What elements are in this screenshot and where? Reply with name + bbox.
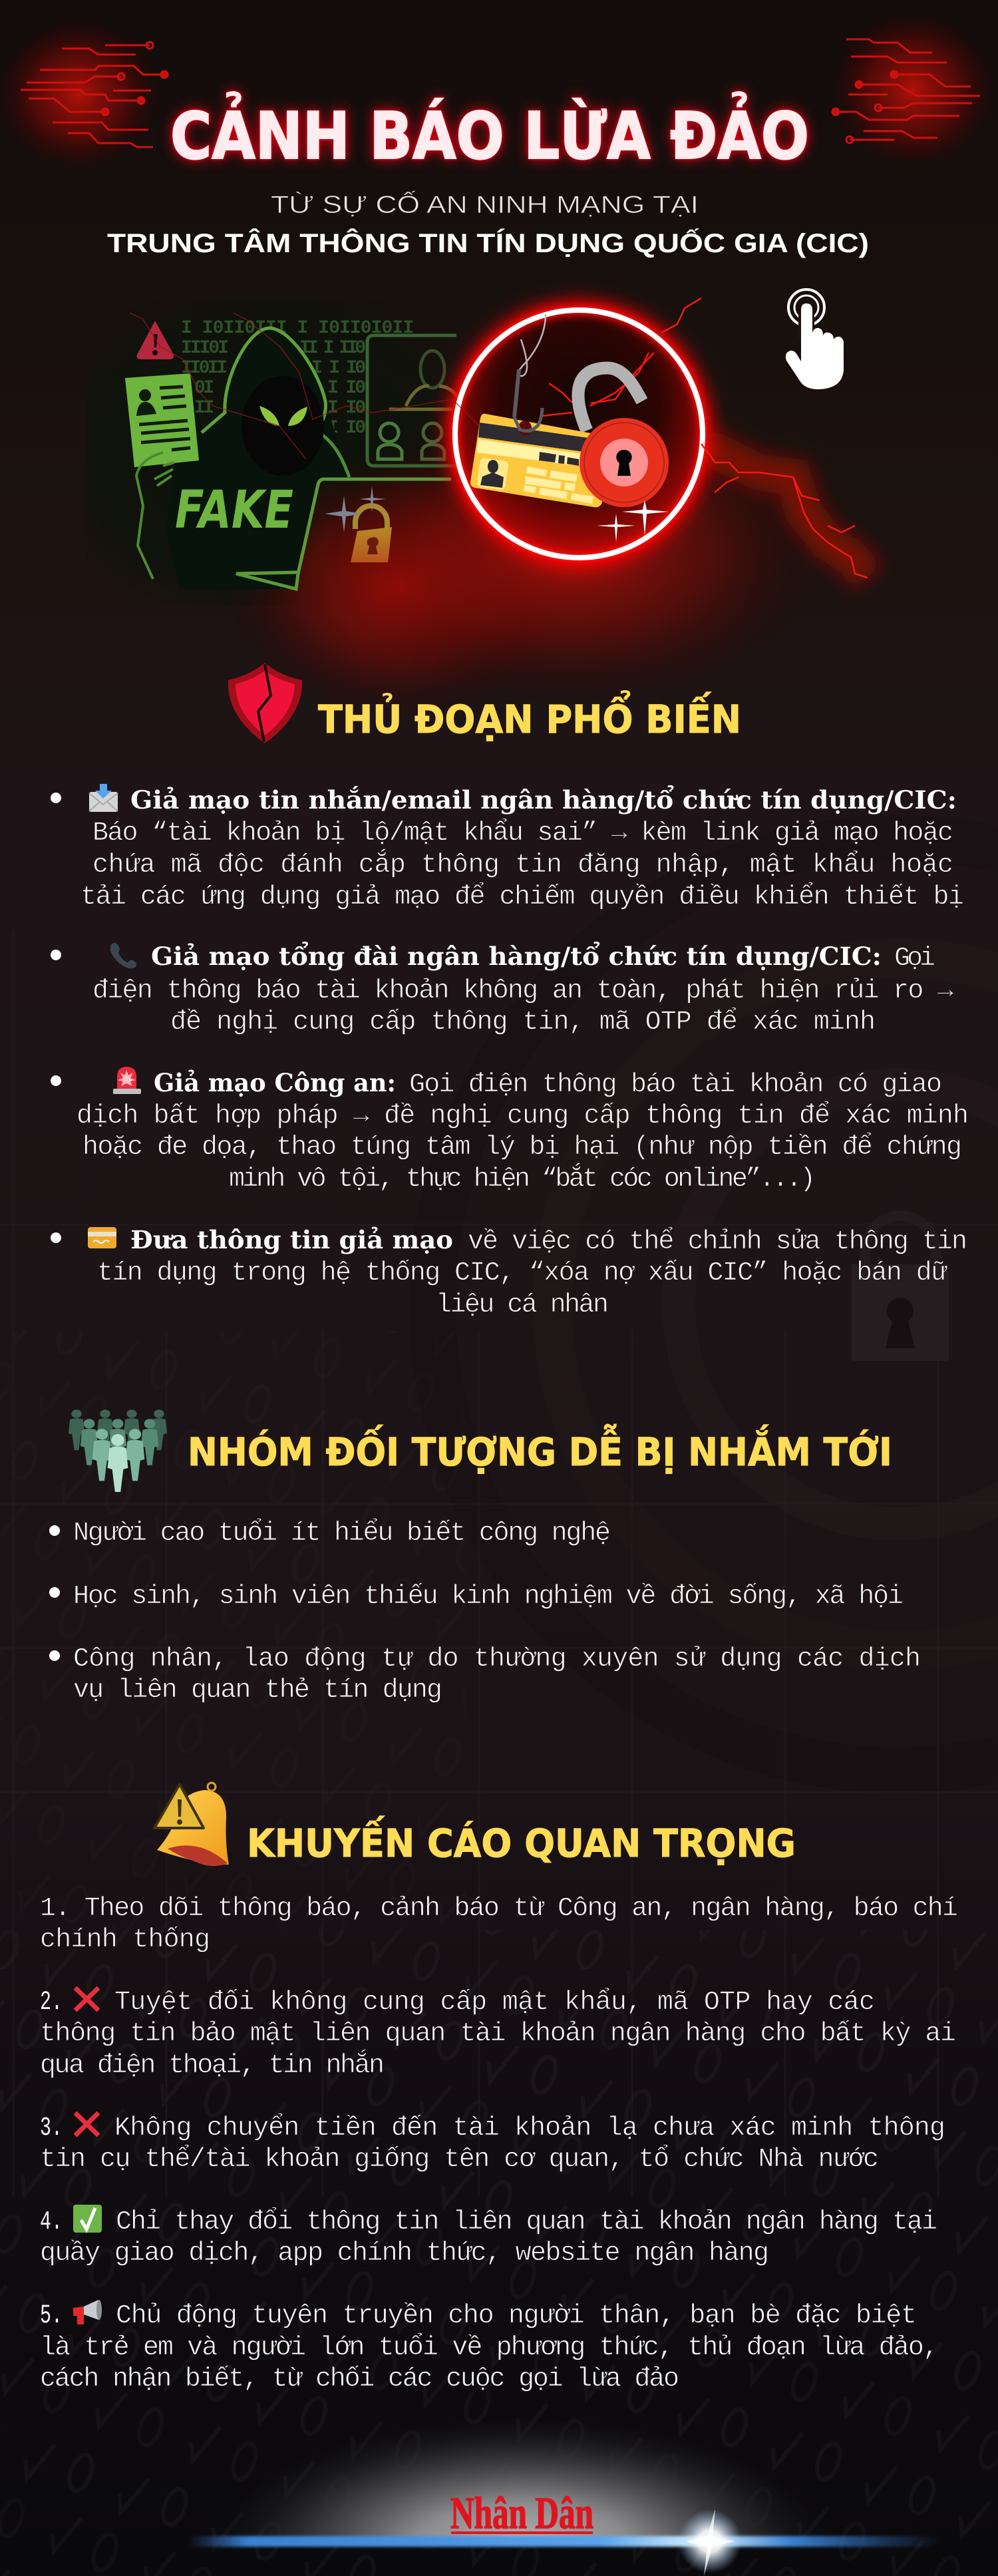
advice 4 [40, 2205, 937, 2269]
bullet list: vụ liên quan thẻ tín dụng [73, 1676, 442, 1706]
advice 5 [40, 2300, 939, 2394]
icon: siren [113, 1067, 141, 1094]
advice 3: tin cụ thể/tài khoản giống tên cơ quan, tổ chức Nhà nước [40, 2143, 879, 2175]
binary code rows: I I [194, 398, 214, 419]
advice 5: Chủ động tuyên truyền cho người thân, bạn bè đặc biệt [116, 2301, 917, 2331]
bullet 1 text: chứa mã độc đánh cắp thông tin đăng nhập, mật khẩu hoặc [92, 848, 953, 880]
binary code rows: I I0 [327, 418, 366, 439]
title: CẢNH BÁO LỪA ĐẢO [170, 92, 809, 174]
advice 1 [40, 1894, 958, 1955]
advice 5: cách nhận biết, từ chối các cuộc gọi lừa đảo [40, 2364, 679, 2394]
binary code rows: I I I0 [311, 358, 366, 379]
advice 3 [40, 2112, 945, 2175]
footer light glow [251, 2433, 792, 2538]
advice 2: thông tin bảo mật liên quan tài khoản ngân hàng cho bất kỳ ai [40, 2019, 956, 2049]
icon: envelope [89, 784, 118, 812]
advice 3: Không chuyển tiền đến tài khoản lạ chưa xác minh thông [114, 2112, 945, 2143]
bullet 3 text [77, 1068, 969, 1195]
bullet 2 text: Gọi [894, 944, 935, 974]
laptop outline [236, 479, 451, 589]
advice 4: quầy giao dịch, app chính thức, website ngân hàng [40, 2239, 769, 2269]
fishing hook [514, 314, 546, 417]
eyes [259, 406, 307, 426]
bullet 3 text: dịch bất hợp pháp → đề nghị cung cấp thông tin để xác minh [77, 1100, 969, 1131]
lightning bolts [130, 298, 868, 578]
bullet 1 text: Giả mạo tin nhắn/email ngân hàng/tổ chức tín dụng/CIC: [130, 785, 957, 815]
binary code rows: I I0 [327, 398, 366, 419]
logo: Nhân Dân: Nhân Dân [450, 2487, 593, 2538]
icon: cracked shield [228, 663, 302, 743]
bullet 2 text: đề nghị cung cấp thông tin, mã OTP để xác minh [170, 1006, 876, 1037]
icon: telephone [110, 943, 136, 968]
binary code rows: II I II0 [299, 338, 366, 359]
binary code rows: I I0II0III I I0II0I0II [181, 318, 414, 339]
bullet 3 text: hoặc đe dọa, thao túng tâm lý bị hại (như nộp tiền để chứng [83, 1131, 962, 1163]
warning triangle [137, 321, 174, 359]
binary code rows: II0II [181, 358, 228, 379]
circuit lines left [21, 42, 168, 147]
hand [136, 453, 174, 579]
open padlock [578, 368, 669, 507]
advice 3: 3. [40, 2114, 63, 2143]
advice 2: 2. [40, 1988, 63, 2018]
bullet list [49, 1517, 921, 1706]
FAKE label: FAKE [175, 480, 293, 540]
advice 2: Tuyệt đối không cung cấp mật khẩu, mã OTP hay các [114, 1987, 875, 2018]
bullet 1 text: Báo “tài khoản bị lộ/mật khẩu sai” → kèm link giả mạo hoặc [92, 818, 953, 848]
advice 2 [40, 1987, 956, 2081]
section 2: target groups [49, 1409, 921, 1706]
hacker illustration backdrop [86, 299, 486, 606]
bullet 4 text: Đưa thông tin giả mạo [130, 1225, 453, 1254]
section 3: important advice [40, 1783, 958, 2394]
bullet 3 text: Gọi điện thông báo tài khoản có giao [409, 1070, 942, 1100]
hood and body [166, 328, 349, 589]
sparkles [325, 486, 386, 532]
binary code rows: I I0 [327, 378, 366, 399]
hook tip and card hole [514, 408, 542, 435]
decorative glow: left top corner [0, 18, 162, 171]
bullet 4 text: về việc có thể chỉnh sửa thông tin [468, 1226, 967, 1257]
illustration: neon circle with card and open lock [455, 310, 703, 558]
bullet list: Học sinh, sinh viên thiếu kinh nghiệm về đời sống, xã hội [73, 1582, 904, 1612]
binary code rows: 0I [194, 378, 214, 399]
section 1: common tricks [51, 663, 969, 1320]
subtitle line 2: TRUNG TÂM THÔNG TIN TÍN DỤNG QUỐC GIA (CIC) [107, 228, 869, 258]
bullet 3 text: Giả mạo Công an: [154, 1068, 396, 1097]
hero red glow [226, 399, 825, 719]
bullet 4 text [97, 1225, 967, 1320]
advice 5: là trẻ em và người lớn tuổi về phương thức, thủ đoạn lừa đảo, [40, 2332, 939, 2363]
heading: NHÓM ĐỐI TƯỢNG DỄ BỊ NHẮM TỚI [188, 1423, 892, 1475]
advice 1: 1. Theo dõi thông báo, cảnh báo từ Công an, ngân hàng, báo chí [40, 1894, 958, 1924]
illustration: hacker with fake document [125, 318, 459, 589]
bullet 4 text: liệu cá nhân [436, 1290, 609, 1320]
bank card [470, 414, 611, 507]
bullet 1 text: tải các ứng dụng giả mạo để chiếm quyền điều khiển thiết bị [81, 881, 964, 912]
lightning inside circle [542, 353, 654, 416]
blue light beam [188, 2536, 942, 2547]
circuit lines right [832, 39, 980, 143]
document [125, 373, 199, 467]
bullet 2 text: Giả mạo tổng đài ngân hàng/tổ chức tín dụng/CIC: [151, 942, 882, 971]
icon: credit card [88, 1227, 116, 1248]
heading: THỦ ĐOẠN PHỔ BIẾN [318, 690, 741, 742]
binary code rows [181, 318, 414, 439]
light flare [678, 2509, 742, 2576]
advice 5: 5. [40, 2301, 63, 2331]
advice 2: qua điện thoại, tin nhắn [40, 2048, 385, 2081]
icon: bell with warning [154, 1783, 229, 1866]
subtitle line 1: TỪ SỰ CỐ AN NINH MẠNG TẠI [271, 190, 699, 218]
bullet list: Công nhân, lao động tự do thường xuyên sử dụng các dịch [73, 1644, 921, 1674]
monitor [367, 335, 459, 466]
bullet 4 text: tín dụng trong hệ thống CIC, “xóa nợ xấu CIC” hoặc bán dữ [97, 1258, 947, 1288]
icon: tapping hand [786, 289, 844, 389]
advice 4: Chỉ thay đổi thông tin liên quan tài khoản ngân hàng tại [116, 2206, 937, 2237]
decorative glow: right top corner [830, 10, 996, 170]
bullet 3 text: minh vô tội, thực hiện “bắt cóc online”...) [229, 1162, 816, 1195]
bullet 2 text [92, 942, 953, 1037]
icon: crowd of people [69, 1409, 167, 1492]
lightning aura [701, 444, 868, 578]
heading: KHUYẾN CÁO QUAN TRỌNG [247, 1815, 796, 1866]
bullet dots [51, 793, 61, 1243]
bullet 1 text [81, 785, 964, 912]
bullet 2 text: điện thông báo tài khoản không an toàn, phát hiện rủi ro → [92, 976, 953, 1006]
footer [190, 2433, 935, 2576]
advice 1: chính thống [40, 1925, 210, 1955]
small padlock [351, 506, 392, 562]
sparkles [597, 500, 669, 542]
bullet list: Người cao tuổi ít hiểu biết công nghệ [73, 1517, 611, 1549]
binary code rows: III0I [181, 338, 229, 359]
advice 4: 4. [40, 2207, 63, 2237]
